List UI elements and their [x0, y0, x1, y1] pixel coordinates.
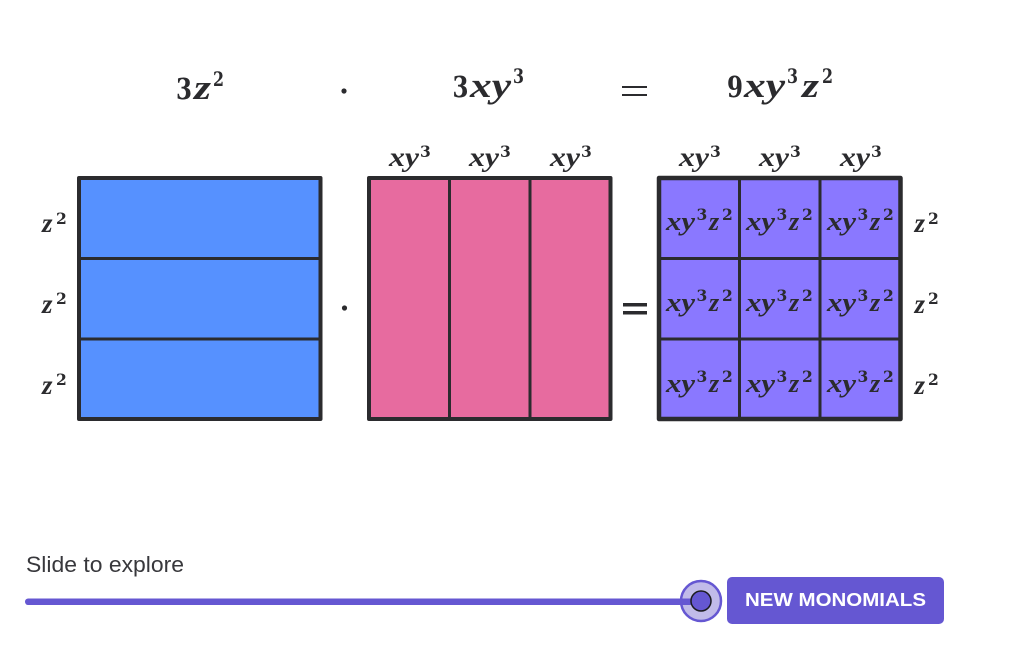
column labels above purple panel: 3: [790, 142, 801, 161]
title equation: equals sign: [622, 86, 647, 96]
column labels above purple panel: 3: [871, 142, 882, 161]
cell labels row 1: [665, 205, 894, 236]
cell labels row 3: [665, 367, 894, 398]
title equation: first monomial: 3: [176, 72, 192, 106]
panel: purple product grid: [659, 178, 900, 419]
cell labels row 1: z: [869, 207, 881, 236]
right row labels z^2: 2: [928, 289, 939, 308]
cell labels row 3: 3: [696, 367, 707, 386]
column labels above purple panel: 3: [710, 142, 721, 161]
button: new monomials: NEW MONOMIALS: [745, 590, 926, 610]
left row labels z^2: 2: [56, 289, 67, 308]
slider label: Slide to explore: [26, 552, 184, 577]
left row labels z^2: z: [41, 208, 53, 238]
cell labels row 3: xy: [745, 369, 776, 398]
cell labels row 1: 3: [696, 205, 707, 224]
cell labels row 3: 3: [776, 367, 787, 386]
title equation: multiplication dot: [341, 88, 347, 94]
cell labels row 1: xy: [665, 207, 696, 236]
cell labels row 2: z: [788, 288, 800, 317]
left row labels z^2: 2: [56, 370, 67, 389]
cell labels row 1: 3: [858, 205, 868, 224]
right row labels z^2: 2: [928, 370, 939, 389]
multiplication dot between panels: [342, 305, 347, 311]
left row labels z^2: z: [41, 289, 53, 319]
cell labels row 2: [665, 286, 894, 317]
cell labels row 2: 3: [858, 286, 868, 305]
column labels above pink panel: xy: [549, 142, 581, 172]
title equation: product: 3: [787, 65, 798, 88]
cell labels row 1: 2: [802, 205, 813, 224]
cell labels row 2: z: [708, 288, 720, 317]
cell labels row 1: xy: [745, 207, 776, 236]
column labels above purple panel: [678, 142, 882, 172]
right row labels z^2: 2: [928, 209, 939, 228]
column labels above pink panel: xy: [388, 142, 420, 172]
cell labels row 3: z: [788, 369, 800, 398]
title equation: first monomial: z: [193, 68, 211, 107]
button: new monomials: [727, 577, 944, 624]
title equation: product: z: [801, 66, 819, 105]
cell labels row 2: 2: [802, 286, 813, 305]
cell labels row 2: 2: [722, 286, 733, 305]
cell labels row 1: z: [788, 207, 800, 236]
cell labels row 3: 2: [802, 367, 813, 386]
panel: pink area model 3xy^3: [369, 178, 610, 419]
title equation: product: [727, 65, 833, 105]
right row labels z^2: z: [914, 289, 926, 319]
panel: blue area model 3z^2: [79, 178, 320, 419]
cell labels row 3: 2: [883, 367, 894, 386]
column labels above pink panel: xy: [468, 142, 500, 172]
left row labels z^2: z: [41, 370, 53, 400]
equals sign between panels: [623, 303, 647, 314]
cell labels row 1: 3: [776, 205, 787, 224]
cell labels row 3: z: [869, 369, 881, 398]
cell labels row 3: 2: [722, 367, 733, 386]
title equation: product: 9: [727, 70, 743, 104]
cell labels row 2: xy: [665, 288, 696, 317]
cell labels row 3: z: [708, 369, 720, 398]
cell labels row 2: 2: [883, 286, 894, 305]
cell labels row 1: 2: [722, 205, 733, 224]
right row labels z^2: [914, 208, 939, 400]
title equation: second monomial: 3: [513, 65, 524, 88]
title equation: second monomial: xy: [469, 66, 512, 105]
cell labels row 1: 2: [883, 205, 894, 224]
column labels above pink panel: 3: [500, 142, 511, 161]
left row labels z^2: 2: [56, 209, 67, 228]
title equation: second monomial: 3: [452, 70, 468, 104]
slider track: [25, 598, 701, 605]
column labels above purple panel: xy: [678, 142, 710, 172]
cell labels row 1: xy: [826, 207, 857, 236]
title equation: second monomial: [452, 65, 524, 105]
column labels above pink panel: 3: [420, 142, 431, 161]
cell labels row 1: z: [708, 207, 720, 236]
cell labels row 2: 3: [776, 286, 787, 305]
title equation: product: xy: [743, 66, 786, 105]
column labels above pink panel: 3: [581, 142, 592, 161]
column labels above pink panel: [388, 142, 592, 172]
left row labels z^2: [41, 208, 67, 400]
cell labels row 3: 3: [858, 367, 868, 386]
title equation: first monomial: 2: [213, 68, 224, 91]
cell labels row 2: z: [869, 288, 881, 317]
right row labels z^2: z: [914, 370, 926, 400]
right row labels z^2: z: [914, 208, 926, 238]
cell labels row 3: xy: [665, 369, 696, 398]
title equation: product: 2: [822, 65, 833, 88]
cell labels row 3: xy: [826, 369, 857, 398]
slider handle: [681, 581, 721, 621]
cell labels row 2: 3: [696, 286, 707, 305]
cell labels row 2: xy: [745, 288, 776, 317]
column labels above purple panel: xy: [839, 142, 871, 172]
cell labels row 2: xy: [826, 288, 857, 317]
column labels above purple panel: xy: [758, 142, 790, 172]
title equation: first monomial: [176, 68, 224, 107]
